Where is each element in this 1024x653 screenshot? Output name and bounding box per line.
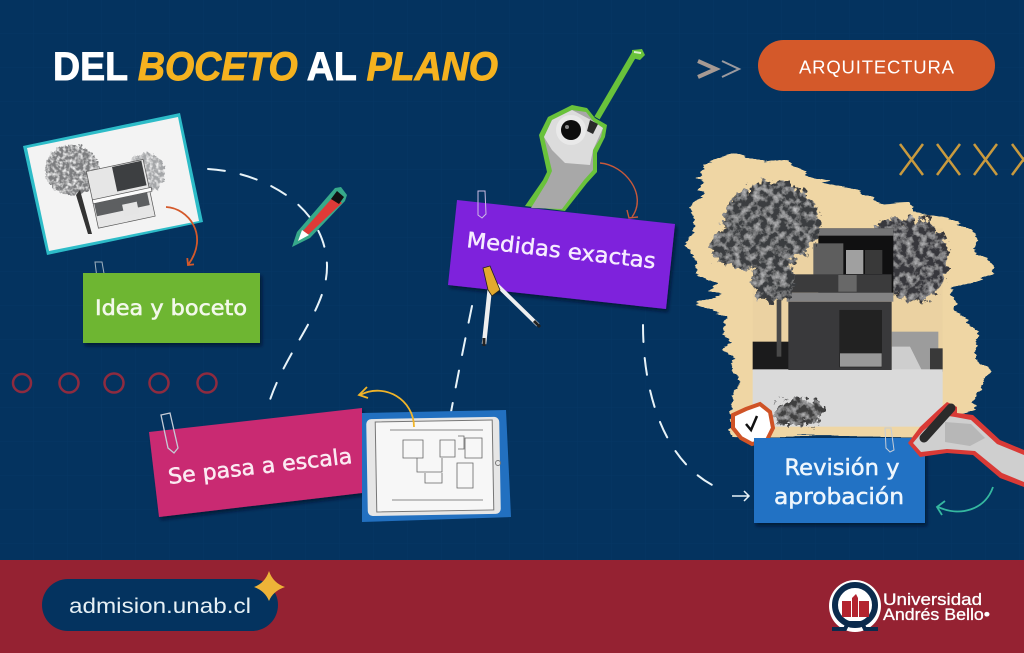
sketch photo	[23, 113, 203, 255]
route arrow to review	[732, 491, 749, 501]
ground	[753, 369, 943, 427]
shield check badge	[733, 404, 773, 444]
side wall and stairs	[753, 332, 943, 372]
website pill: admision.unab.cl	[69, 595, 251, 618]
step: idea y boceto	[83, 273, 260, 343]
teal arrow	[937, 487, 993, 515]
house	[787, 228, 893, 370]
step: revision y aprobacion: aprobación	[774, 485, 904, 510]
step: medidas exactas: Medidas exactas	[465, 228, 657, 274]
sketch tree trunk	[76, 190, 92, 234]
tree right	[873, 218, 948, 302]
torn paper	[685, 153, 993, 437]
hand with measuring tape	[525, 49, 645, 211]
paperclip pink	[161, 413, 178, 453]
step: revision y aprobacion: Revisión y	[784, 456, 900, 481]
title: DEL BOCETO AL PLANO	[53, 45, 498, 89]
logo wordmark: Universidad	[883, 590, 982, 609]
decorative chevrons	[698, 61, 739, 77]
tablet with floor plan	[362, 410, 511, 522]
paperclip blue	[885, 428, 894, 452]
university logo	[829, 580, 990, 632]
paperclip green	[95, 262, 106, 289]
step: se pasa a escala	[149, 408, 362, 517]
yellow arrow	[359, 387, 414, 427]
tree trunk	[777, 300, 781, 357]
house collage	[685, 153, 993, 437]
orange arrow 2	[600, 163, 638, 218]
logo wordmark: Andrés Bello•	[883, 605, 990, 624]
hand with marker	[908, 402, 1024, 487]
category badge	[758, 40, 995, 91]
paperclip purple	[478, 191, 486, 218]
step: se pasa a escala: Se pasa a escala	[167, 444, 353, 490]
sketch house	[86, 159, 157, 228]
category badge: ARQUITECTURA	[799, 56, 955, 78]
decorative circles	[13, 374, 216, 392]
decorative x row	[900, 144, 1024, 175]
icon: pencil	[292, 187, 347, 247]
website pill	[42, 579, 278, 631]
icon: star	[254, 571, 285, 601]
step: revision y aprobacion	[754, 438, 925, 523]
footer band	[0, 560, 1024, 653]
step: idea y boceto: Idea y boceto	[95, 296, 247, 321]
floor plan	[390, 430, 483, 500]
logo seal	[829, 580, 881, 632]
tree left	[710, 182, 820, 302]
step: medidas exactas	[448, 200, 675, 309]
dashed route	[208, 169, 716, 487]
icon: compass	[483, 266, 540, 346]
sketch trees	[45, 145, 165, 195]
orange arrow	[166, 207, 197, 265]
logo wordmark	[883, 590, 990, 624]
